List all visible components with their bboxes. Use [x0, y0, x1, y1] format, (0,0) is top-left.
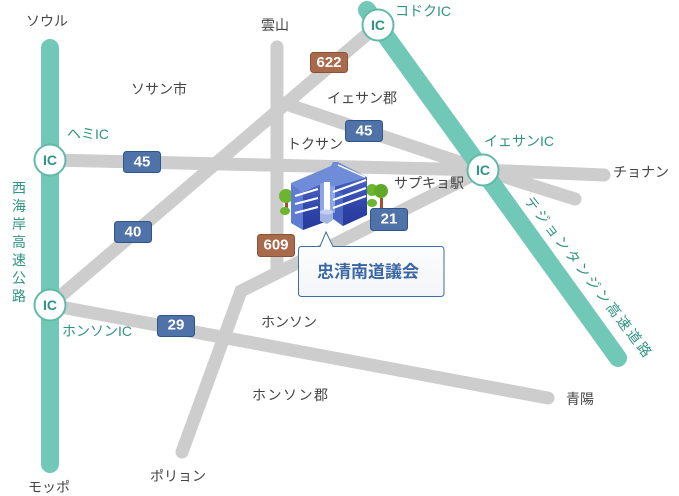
- dangjin expressway label: テジョンタンジン高速道路: [522, 193, 655, 360]
- route badge 622: 622: [316, 54, 342, 71]
- route badge 29: [158, 316, 194, 336]
- place labels: ソウル: [26, 13, 68, 29]
- gray road network: [50, 25, 604, 452]
- interchange labels: コドクIC: [395, 3, 451, 19]
- place labels: モッポ: [28, 479, 70, 495]
- route badge 609: [258, 234, 294, 256]
- route badge 45 west: [124, 152, 160, 172]
- dangjin expressway: [367, 10, 618, 358]
- west coast expressway label: 速: [12, 252, 26, 268]
- place labels: ホンソン郡: [252, 387, 328, 403]
- west coast expressway label: 海: [12, 198, 26, 214]
- interchange: Yesan IC: [468, 154, 498, 186]
- place labels: サプキョ駅: [394, 175, 464, 191]
- place labels: トクサン: [287, 136, 343, 152]
- callout: 忠清南道議会: [298, 232, 444, 296]
- interchange: Yesan IC: IC: [476, 162, 490, 178]
- interchange: Godeok IC: [362, 10, 394, 40]
- route badge 45 north: [346, 120, 382, 142]
- interchange labels: イェサンIC: [484, 133, 554, 149]
- icon: trees right: [366, 184, 388, 208]
- place labels: ポリョン: [150, 468, 206, 484]
- route badge 40: 40: [125, 224, 141, 240]
- place labels: チョナン: [613, 164, 669, 180]
- west coast expressway label: 高: [12, 234, 26, 250]
- route badge 609: 609: [263, 236, 289, 254]
- place labels: 青陽: [566, 391, 594, 407]
- interchange labels: [62, 3, 554, 339]
- place labels: 雲山: [261, 17, 289, 33]
- interchange: Hemi IC: [34, 144, 66, 176]
- west coast expressway label: 公: [12, 270, 26, 286]
- interchange: Hongseong IC: IC: [43, 297, 57, 313]
- icon: assembly building: [291, 162, 367, 230]
- west coast expressway label: 西: [12, 180, 26, 196]
- interchange labels: ヘミIC: [67, 126, 109, 142]
- interchange: Godeok IC: IC: [371, 17, 385, 33]
- place labels: ホンソン: [261, 314, 317, 330]
- route badge 45 west: 45: [134, 154, 150, 170]
- route badge 40: [114, 222, 152, 242]
- callout: 忠清南道議会: 忠清南道議会: [317, 262, 419, 282]
- icon: trees left: [279, 189, 293, 215]
- route badge 45 north: 45: [356, 122, 372, 140]
- west coast expressway label: 岸: [12, 216, 26, 232]
- place labels: ソサン市: [131, 81, 187, 97]
- interchange: Hongseong IC: [34, 290, 66, 320]
- west coast expressway label: [12, 180, 26, 304]
- place labels: イェサン郡: [327, 90, 397, 106]
- route badge 21: 21: [381, 210, 397, 228]
- west coast expressway: [41, 48, 59, 464]
- west coast expressway label: 路: [12, 288, 26, 304]
- route badge 29: 29: [168, 316, 184, 334]
- interchange labels: ホンソンIC: [62, 323, 132, 339]
- interchange: Hemi IC: IC: [43, 152, 57, 168]
- route badge 21: [370, 208, 408, 230]
- route badge 622: [310, 52, 348, 72]
